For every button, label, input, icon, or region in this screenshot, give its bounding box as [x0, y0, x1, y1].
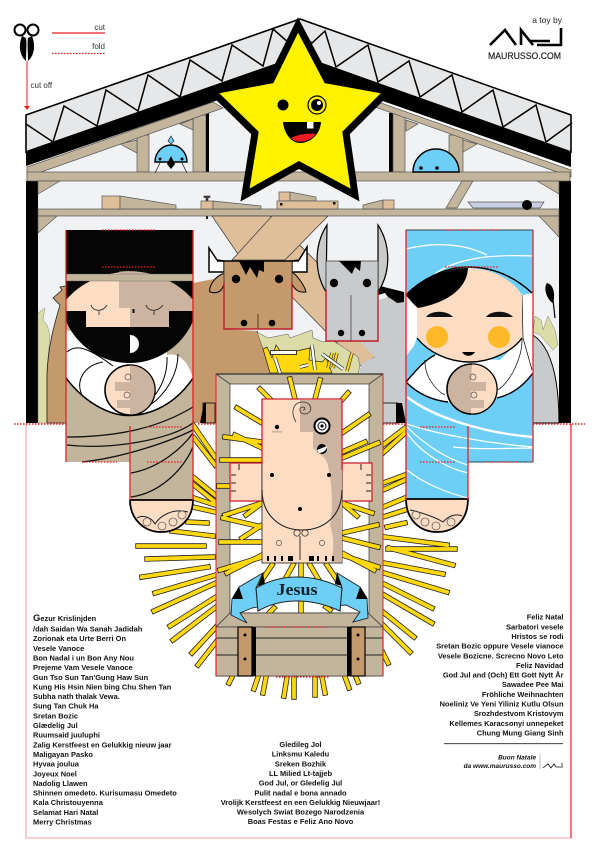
- Joseph hat: [66, 230, 193, 274]
- Joseph red cut lines: [66, 230, 193, 500]
- banner text: Jesus: Jesus: [276, 580, 318, 599]
- greetings list right: Kellemes Karacsonyi unnepeket: [449, 719, 564, 728]
- greetings list right: Srozhdestvom Kristovym: [474, 709, 564, 718]
- greetings list left: Sretan Bozic: [33, 711, 78, 720]
- legend: cut and fold: fold: [92, 42, 105, 51]
- greetings list left: Shinnen omedeto. Kurisumasu Omedeto: [33, 789, 177, 798]
- sign-off: Buon Natale: da www.maurusso.com: [464, 763, 536, 770]
- cut and fold lines: [14, 424, 585, 838]
- greetings list centre: Gledileg Jol: [279, 740, 322, 749]
- Jesus eye: [314, 418, 330, 434]
- figure: Mary: [406, 230, 533, 532]
- manger box front: [216, 613, 383, 677]
- greetings list centre: [221, 740, 380, 826]
- sign-off: Buon Natale: Buon Natale: [498, 754, 536, 762]
- icon: scissors: [14, 24, 38, 61]
- manger frame: [216, 374, 383, 676]
- greetings list left: Nadolig Llawen: [33, 779, 88, 788]
- greetings list left: Kung His Hsin Nien bing Chu Shen Tan: [33, 682, 172, 691]
- logo: a toy by Maurusso: MAURUSSO.COM: [488, 51, 561, 62]
- Jesus arms: [230, 463, 372, 501]
- grass left: [38, 308, 50, 423]
- Joseph baby head: [105, 365, 155, 415]
- greetings list left: Zalig Kerstfeest en Gelukkig nieuw jaar: [33, 740, 172, 749]
- greetings list centre: Vrolijk Kerstfeest en een Gelukkig Nieuwjaar!: [221, 798, 380, 807]
- sign-off: Buon Natale: [444, 744, 563, 770]
- legend: cut and fold: [52, 23, 106, 54]
- greetings list centre: Sreken Bozhik: [275, 759, 327, 768]
- timber frame beams and posts: [26, 102, 571, 423]
- greetings list left: Gezur Krislinjden: [33, 613, 97, 624]
- greetings list centre: LL Milied Lt-tajjeb: [269, 769, 332, 778]
- sun rays of straw behind manger: [138, 425, 455, 697]
- greetings list right: Fröhliche Weihnachten: [482, 690, 564, 699]
- Mary cheeks: [426, 326, 448, 348]
- Joseph cloth folds: [66, 330, 193, 416]
- tools on shelf: [102, 192, 544, 219]
- Mary robe highlights: [406, 245, 533, 498]
- greetings list left: Hyvaa joulua: [33, 760, 80, 769]
- greetings list centre: God Jul, or Gledelig Jul: [259, 779, 342, 788]
- ox head: [209, 247, 307, 329]
- greetings list right: Feliz Navidad: [516, 661, 564, 670]
- greetings list centre: Pulit nadal e bona annado: [254, 788, 347, 797]
- straw pile: [257, 330, 360, 374]
- hooves: [200, 403, 406, 423]
- greetings list left: Kala Christouyenna: [33, 798, 104, 807]
- Mary red cut lines: [406, 230, 533, 500]
- arrow: cut off: [24, 61, 53, 110]
- blue round character: [413, 149, 459, 172]
- greetings list left: Zorionak eta Urte Berri On: [33, 634, 126, 643]
- greetings list left: Merry Christmas: [33, 818, 92, 826]
- figure: Joseph: [66, 230, 193, 532]
- straw rays inside manger: [219, 379, 378, 618]
- greetings list right: Sretan Bozic oppure Vesele vianoce: [436, 642, 564, 651]
- greetings list left: Bon Nadal i un Bon Any Nou: [33, 654, 134, 662]
- banner: [231, 573, 368, 623]
- Mary hair: [406, 268, 468, 308]
- greetings list right: [436, 613, 564, 738]
- arrow: cut off: cut off: [30, 81, 53, 90]
- greetings list left: Joyeux Noel: [33, 769, 77, 778]
- Mary robe: [406, 230, 533, 500]
- greetings list left: Gun Tso Sun Tan'Gung Haw Sun: [33, 673, 149, 682]
- greetings list right: Sarbatori vesele: [506, 622, 564, 631]
- greetings list left: Prejeme Vam Vesele Vanoce: [33, 663, 133, 672]
- ox body: [47, 277, 272, 423]
- greetings list right: Vesele Bozicne. Screcno Novo Leto: [438, 651, 564, 660]
- greetings list right: God Jul and (Och) Ett Gott Nytt År: [443, 671, 564, 680]
- Jesus hair spiral: [293, 402, 311, 422]
- Mary foot: [406, 499, 468, 532]
- blue bird character: [155, 136, 187, 173]
- donkey body: [359, 283, 559, 423]
- crossed planks behind animals: [212, 216, 378, 368]
- greetings list centre: Boas Festas e Feliz Ano Novo: [248, 817, 354, 826]
- Mary veil: [406, 293, 533, 402]
- greetings list centre: Wesolych Swiat Bozego Narodzenia: [237, 808, 365, 817]
- greetings list left: Subha nath thalak Vewa.: [33, 692, 120, 701]
- greetings list centre: Linksmu Kaledu: [272, 750, 330, 759]
- greetings list right: Sawadee Pee Mai: [502, 680, 564, 689]
- star: [212, 25, 388, 195]
- legend: cut and fold: cut: [94, 23, 106, 32]
- Joseph beard: [66, 281, 193, 363]
- Joseph face: [66, 272, 193, 327]
- greetings list right: Noeliniz Ve Yeni Yiliniz Kutlu Olsun: [440, 700, 564, 708]
- greetings list left: Selamat Hari Natal: [33, 808, 98, 817]
- greetings list right: Feliz Natal: [527, 613, 564, 622]
- greetings list left: Sung Tan Chuk Ha: [33, 702, 99, 711]
- donkey head: [317, 225, 388, 341]
- logo: a toy by Maurusso: a toy by: [532, 15, 563, 25]
- logo: a toy by Maurusso: [488, 15, 563, 62]
- Mary baby head: [447, 364, 497, 414]
- greetings list left: [33, 613, 177, 826]
- greetings list left: /dah Saidan Wa Sanah Jadidah: [33, 624, 143, 634]
- greetings list left: Vesele Vanoce: [33, 644, 84, 653]
- roof truss: [26, 19, 572, 167]
- Mary face: [417, 268, 522, 362]
- Joseph foot: [130, 500, 193, 532]
- Joseph robe: [66, 281, 193, 500]
- greetings list left: Maligayan Pasko: [33, 750, 93, 759]
- greetings list left: Ruumsaid juuluphi: [33, 731, 100, 740]
- panel: stable interior background: [26, 80, 571, 423]
- greetings list right: Chung Mung Giang Sinh: [477, 728, 564, 738]
- Jesus body: [262, 399, 342, 563]
- greetings list right: Hristos se rodi: [511, 632, 564, 641]
- greetings list left: Glædelig Jul: [33, 721, 78, 730]
